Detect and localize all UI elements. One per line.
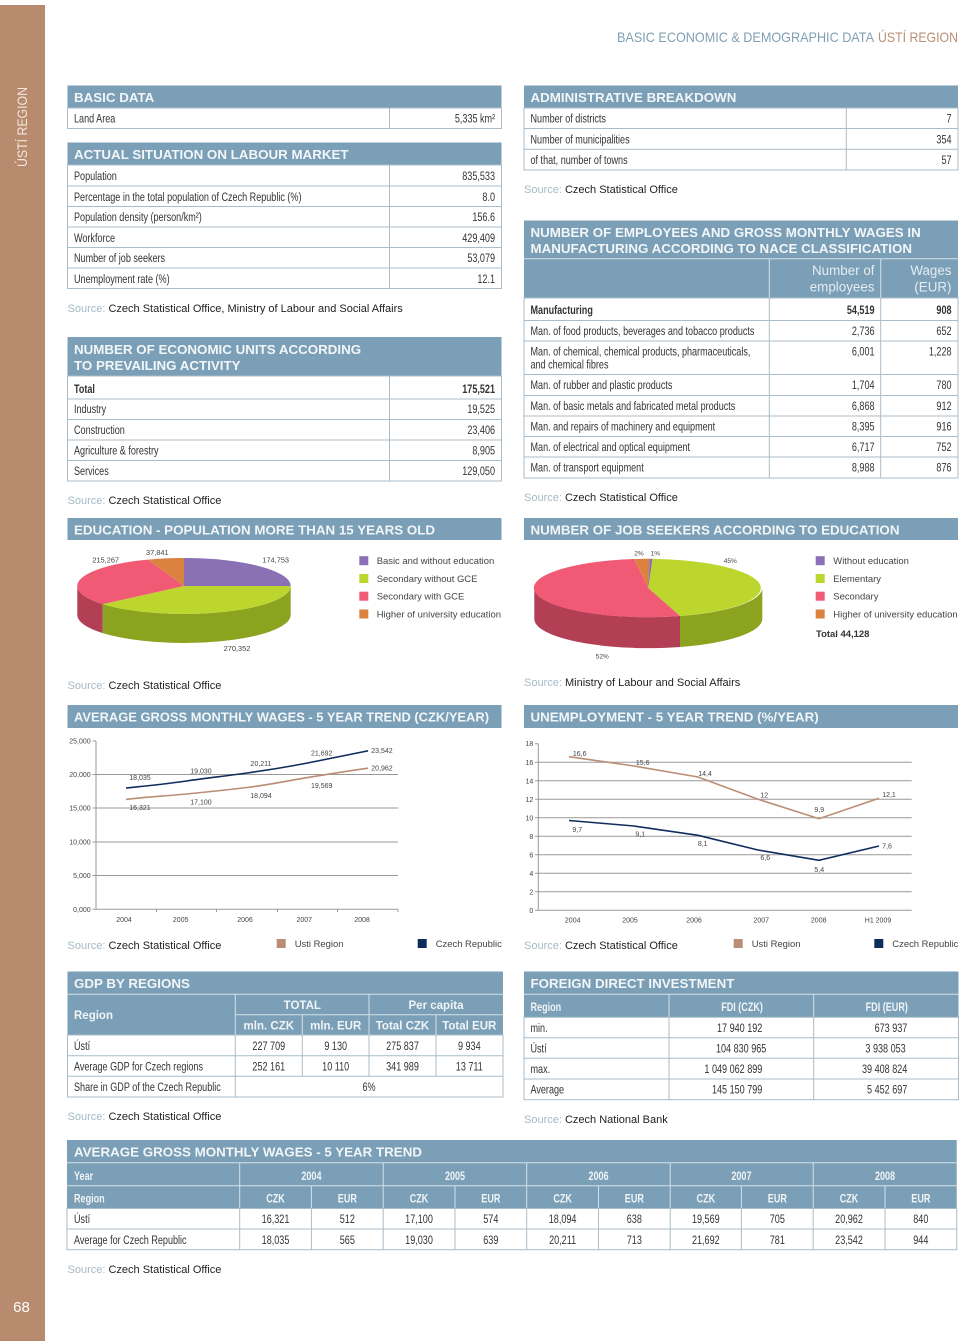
page header: BASIC ECONOMIC & DEMOGRAPHIC DATA <box>617 29 875 45</box>
line chart: unemployment: 0 <box>529 908 533 915</box>
line chart: unemployment: 2006 <box>686 918 702 924</box>
line chart: unemployment: 2008 <box>811 918 827 924</box>
panel: wages 5 year table: CZK <box>697 1192 715 1206</box>
panel: GDP by regions: 9 130 <box>324 1040 347 1053</box>
panel: foreign direct investment: Region <box>531 1001 561 1014</box>
panel: labour market: Workforce <box>74 232 115 245</box>
panel: wages 5 year table: 2005 <box>445 1170 465 1183</box>
panel: foreign direct investment: 17 940 192 <box>717 1022 762 1035</box>
line chart: unemployment: 9,1 <box>635 832 645 838</box>
line chart: wages: 16,321 <box>129 805 151 812</box>
line chart: unemployment: 9,7 <box>572 827 582 834</box>
panel: labour market: 156.6 <box>472 211 495 224</box>
panel: education pie <box>68 518 502 653</box>
panel: foreign direct investment: Ústí <box>531 1041 547 1056</box>
panel: employees and wages: Man. of basic metals and fabricated metal products <box>531 400 735 413</box>
pie chart: education: 215,267 <box>92 556 119 564</box>
source: Source: Czech Statistical Office <box>68 495 221 507</box>
panel: foreign direct investment <box>524 972 958 1100</box>
line chart: unemployment: 12 <box>760 792 768 800</box>
panel: administrative breakdown: ADMINISTRATIVE BREAKDOWN <box>530 90 736 105</box>
legend: unemployment chart: Czech Republic <box>892 939 959 950</box>
panel: wages 5 year table: 21,692 <box>692 1234 720 1247</box>
line chart: unemployment: 12,1 <box>882 792 896 799</box>
panel: economic units: 19,525 <box>467 403 495 416</box>
panel: wages 5 year table <box>67 1140 957 1250</box>
panel: employees and wages: Man. of electrical and optical equipment <box>531 441 690 454</box>
line chart: unemployment: 2 <box>529 889 533 896</box>
panel: employees and wages: 6,868 <box>852 400 875 413</box>
panel: employees and wages: 1,704 <box>852 379 875 392</box>
line chart: unemployment: 16 <box>526 760 533 767</box>
panel: wages 5 year table: Year <box>74 1170 93 1183</box>
panel: wages line chart: AVERAGE GROSS MONTHLY WAGES - 5 YEAR TREND (CZK/YEAR) <box>74 710 489 724</box>
panel: labour market: Number of job seekers <box>74 252 165 265</box>
panel: employees and wages: 912 <box>936 400 952 413</box>
panel: GDP by regions: Total CZK <box>376 1019 430 1033</box>
panel: wages 5 year table: 840 <box>913 1213 928 1226</box>
panel: wages 5 year table: 18,035 <box>262 1234 289 1247</box>
legend: job seekers <box>816 556 958 640</box>
line chart: wages: 25,000 <box>69 738 91 746</box>
panel: GDP by regions: 341 989 <box>386 1060 419 1074</box>
pie chart: education <box>77 548 291 653</box>
line chart: wages: 2004 <box>116 917 132 924</box>
panel: GDP by regions: 13 711 <box>456 1060 483 1074</box>
source: Source: Czech Statistical Office <box>524 492 678 504</box>
line chart: unemployment: 15,6 <box>636 760 650 767</box>
line chart: wages: 18,094 <box>250 793 272 800</box>
panel: wages 5 year table: 20,962 <box>835 1213 863 1226</box>
legend: job seekers: Without education <box>833 556 909 567</box>
legend: job seekers: Higher of university education <box>833 609 958 620</box>
line chart: unemployment: 9,9 <box>814 807 824 814</box>
panel: wages 5 year table: 2008 <box>875 1170 895 1183</box>
source: Source: Czech Statistical Office, Ministry of Labour and Social Affairs <box>68 303 403 315</box>
panel: labour market: Population <box>74 170 117 183</box>
panel: wages 5 year table: 565 <box>340 1234 355 1247</box>
line chart: unemployment: 7,6 <box>882 844 892 850</box>
panel: economic units: 129,050 <box>462 465 495 478</box>
panel: employees and wages: 908 <box>936 304 952 317</box>
line chart: unemployment: 16,6 <box>573 751 587 758</box>
panel: employees and wages: Manufacturing <box>531 304 593 317</box>
panel: wages 5 year table: Average for Czech Republic <box>74 1234 187 1247</box>
panel: employees and wages: 2,736 <box>852 325 875 338</box>
panel: basic data: 5,335 km² <box>455 112 496 126</box>
panel: economic units: TO PREVAILING ACTIVITY <box>74 358 241 373</box>
panel: economic units: Total <box>74 383 95 396</box>
panel: employees and wages: and chemical fibres <box>531 358 609 372</box>
panel: labour market: Percentage in the total population of Czech Republic (%) <box>74 191 301 204</box>
panel: GDP by regions: TOTAL <box>284 999 321 1012</box>
line chart: unemployment: 5,4 <box>814 867 824 874</box>
panel: employees and wages: 8,395 <box>852 420 875 434</box>
panel: employees and wages: 876 <box>936 461 952 475</box>
panel: employees and wages: Man. of food products, beverages and tobacco products <box>531 325 754 338</box>
panel: employees and wages: 652 <box>936 325 952 338</box>
panel: GDP by regions: Average GDP for Czech regions <box>74 1060 203 1074</box>
panel: foreign direct investment: 673 937 <box>875 1022 907 1035</box>
panel: economic units: NUMBER OF ECONOMIC UNITS ACCORDING <box>74 342 361 357</box>
line chart: wages: 17,100 <box>190 800 212 806</box>
pie chart: education: 37,841 <box>146 548 169 557</box>
panel: wages 5 year table: 713 <box>627 1234 642 1247</box>
panel: wages 5 year table: 639 <box>483 1234 498 1247</box>
legend: education <box>359 556 501 620</box>
panel: basic data <box>68 86 502 128</box>
panel: wages 5 year table: 944 <box>913 1234 928 1247</box>
panel: economic units <box>68 337 502 481</box>
panel: employees and wages: MANUFACTURING ACCORDING TO NACE CLASSIFICATION <box>530 241 912 256</box>
line chart: unemployment <box>526 741 912 924</box>
panel: economic units: Construction <box>74 424 125 437</box>
panel: wages 5 year table: 16,321 <box>262 1213 289 1226</box>
panel: GDP by regions: mln. CZK <box>244 1019 295 1033</box>
panel: wages 5 year table: EUR <box>338 1192 357 1206</box>
source: Source: Ministry of Labour and Social Affairs <box>524 677 741 689</box>
panel: foreign direct investment: 104 830 965 <box>716 1042 766 1056</box>
panel: employees and wages: 1,228 <box>929 345 952 359</box>
panel: labour market: 12.1 <box>477 273 495 286</box>
line chart: unemployment: 2004 <box>565 918 581 924</box>
panel: job seekers pie <box>524 518 958 660</box>
panel: basic data: Land Area <box>74 112 115 126</box>
legend: education: Basic and without education <box>377 556 494 567</box>
panel: wages 5 year table: EUR <box>911 1192 931 1206</box>
panel: GDP by regions <box>68 972 503 1097</box>
legend: unemployment chart <box>734 939 959 950</box>
panel: wages 5 year table: 574 <box>483 1213 498 1226</box>
panel: wages 5 year table: 2007 <box>731 1170 752 1183</box>
line chart: wages: 2007 <box>297 917 312 924</box>
panel: GDP by regions: Total EUR <box>442 1019 497 1033</box>
panel: employees and wages: 6,717 <box>852 441 875 454</box>
panel: foreign direct investment: max. <box>531 1063 550 1076</box>
panel: administrative breakdown: Number of municipalities <box>531 133 630 147</box>
panel: GDP by regions: mln. EUR <box>310 1019 362 1033</box>
panel: foreign direct investment: 145 150 799 <box>712 1083 762 1097</box>
legend: wages chart: Czech Republic <box>436 939 502 950</box>
panel: labour market: ACTUAL SITUATION ON LABOUR MARKET <box>74 147 349 162</box>
panel: employees and wages: Wages <box>910 263 952 278</box>
line chart: unemployment: H1 2009 <box>865 918 891 924</box>
pie chart: job seekers: 2% <box>634 550 644 557</box>
panel: employees and wages: Number of <box>812 263 875 278</box>
panel: foreign direct investment: 39 408 824 <box>862 1063 907 1076</box>
panel: unemployment line chart <box>524 705 958 924</box>
panel: wages 5 year table: 781 <box>770 1234 785 1247</box>
source: Source: Czech National Bank <box>524 1114 668 1126</box>
pie chart: job seekers: 1% <box>651 550 660 557</box>
panel: economic units: Services <box>74 465 109 478</box>
panel: wages 5 year table: 20,211 <box>549 1234 576 1247</box>
line chart: unemployment: 18 <box>526 741 533 748</box>
source: Source: Czech Statistical Office <box>68 680 221 692</box>
panel: labour market: 53,079 <box>467 252 495 265</box>
panel: administrative breakdown: of that, number of towns <box>531 154 628 167</box>
panel: basic data: BASIC DATA <box>74 90 155 105</box>
panel: economic units: 8,905 <box>472 444 495 458</box>
panel: GDP by regions: 9 934 <box>458 1040 481 1053</box>
panel: wages 5 year table: Region <box>74 1192 105 1206</box>
line chart: unemployment: 6 <box>529 852 533 859</box>
panel: administrative breakdown: 7 <box>946 112 952 126</box>
line chart: unemployment: 12 <box>526 797 533 804</box>
line chart: unemployment: 2005 <box>622 918 638 924</box>
panel: GDP by regions: 10 110 <box>322 1060 349 1074</box>
panel: employees and wages: 6,001 <box>852 345 875 359</box>
panel: economic units: Agriculture & forestry <box>74 444 159 458</box>
panel: employees and wages: 916 <box>936 420 952 434</box>
panel: employees and wages: 752 <box>936 441 952 454</box>
panel: employees and wages <box>524 220 958 478</box>
panel: job seekers pie: NUMBER OF JOB SEEKERS ACCORDING TO EDUCATION <box>530 522 899 538</box>
panel: foreign direct investment: 3 938 053 <box>865 1042 906 1056</box>
panel: wages 5 year table: CZK <box>840 1192 859 1206</box>
line chart: unemployment: 14 <box>526 778 533 785</box>
panel: employees and wages: NUMBER OF EMPLOYEES AND GROSS MONTHLY WAGES IN <box>530 225 921 240</box>
panel: administrative breakdown: 57 <box>941 154 952 167</box>
source: Source: Czech Statistical Office <box>524 940 678 952</box>
panel: GDP by regions: Share in GDP of the Czech Republic <box>74 1081 221 1094</box>
panel: foreign direct investment: FOREIGN DIRECT INVESTMENT <box>530 976 734 991</box>
panel: wages 5 year table: 19,030 <box>405 1234 433 1247</box>
legend: unemployment chart: Usti Region <box>752 939 800 950</box>
panel: employees and wages: (EUR) <box>914 280 952 294</box>
panel: foreign direct investment: Average <box>531 1083 564 1097</box>
panel: employees and wages: Man. and repairs of machinery and equipment <box>531 420 715 434</box>
line chart: wages: 2005 <box>173 917 189 924</box>
line chart: wages: 23,542 <box>371 748 393 755</box>
pie chart: education: 270,352 <box>224 644 250 653</box>
panel: foreign direct investment: FDI (EUR) <box>866 1001 908 1014</box>
source: Source: Czech Statistical Office <box>68 1264 221 1276</box>
panel: wages 5 year table: EUR <box>768 1192 787 1206</box>
pie chart: education: 174,753 <box>262 556 289 564</box>
panel: economic units: 23,406 <box>467 424 495 437</box>
panel: wages 5 year table: 2006 <box>588 1170 609 1183</box>
panel: labour market: Unemployment rate (%) <box>74 273 170 286</box>
panel: labour market <box>68 142 502 288</box>
panel: GDP by regions: Region <box>74 1009 113 1022</box>
panel: economic units: 175,521 <box>462 383 495 396</box>
panel: employees and wages: Man. of transport equipment <box>531 461 644 475</box>
line chart: wages: 18,035 <box>129 775 151 782</box>
panel: employees and wages: Man. of rubber and plastic products <box>531 379 672 392</box>
pie chart: job seekers: 45% <box>724 558 737 565</box>
panel: employees and wages: 8,988 <box>852 461 875 475</box>
sidebar <box>0 5 45 1341</box>
panel: GDP by regions: Ústí <box>74 1039 90 1053</box>
panel: wages 5 year table: 2004 <box>301 1170 322 1183</box>
panel: administrative breakdown: 354 <box>936 133 952 147</box>
line chart: wages: 19,030 <box>190 768 212 776</box>
line chart: wages: 2006 <box>237 917 253 924</box>
source: Source: Czech Statistical Office <box>524 184 678 196</box>
panel: labour market: 8.0 <box>482 191 495 204</box>
legend: education: Higher of university education <box>377 609 501 620</box>
line chart: unemployment: 10 <box>526 815 533 822</box>
panel: foreign direct investment: min. <box>531 1022 548 1035</box>
line chart: unemployment: 2007 <box>754 918 769 924</box>
pie chart: job seekers <box>534 550 762 660</box>
panel: GDP by regions: 252 161 <box>252 1060 285 1074</box>
panel: foreign direct investment: 1 049 062 899 <box>704 1063 762 1076</box>
panel: employees and wages: 780 <box>936 379 952 392</box>
panel: employees and wages: 54,519 <box>847 304 875 317</box>
panel: wages 5 year table: CZK <box>553 1192 572 1206</box>
line chart: wages: 0,000 <box>73 907 91 914</box>
line chart: wages: 19,569 <box>311 783 333 790</box>
panel: economic units: Industry <box>74 403 107 416</box>
page number: 68 <box>13 1299 30 1316</box>
panel: wages line chart <box>68 705 502 924</box>
line chart: unemployment: 8 <box>529 834 533 841</box>
panel: wages 5 year table: 705 <box>770 1213 785 1226</box>
line chart: wages: 21,692 <box>311 750 333 758</box>
panel: GDP by regions: GDP BY REGIONS <box>74 976 190 991</box>
legend: job seekers: Elementary <box>833 574 881 585</box>
legend: education: Secondary without GCE <box>377 574 477 585</box>
line chart: wages: 20,000 <box>69 772 91 779</box>
panel: GDP by regions: 6% <box>363 1081 376 1094</box>
line chart: wages: 20,962 <box>371 766 393 772</box>
panel: administrative breakdown: Number of districts <box>531 112 606 126</box>
sidebar label: ÚSTÍ REGION <box>15 87 30 167</box>
panel: wages 5 year table: 23,542 <box>835 1234 863 1247</box>
panel: wages 5 year table: 19,569 <box>692 1213 720 1226</box>
panel: education pie: EDUCATION - POPULATION MORE THAN 15 YEARS OLD <box>74 522 435 538</box>
panel: unemployment line chart: UNEMPLOYMENT - 5 YEAR TREND (%/YEAR) <box>530 710 819 724</box>
line chart: unemployment: 4 <box>529 871 533 878</box>
panel: wages 5 year table: CZK <box>410 1192 429 1206</box>
panel: GDP by regions: 227 709 <box>252 1040 285 1053</box>
panel: wages 5 year table: EUR <box>481 1192 501 1206</box>
panel: employees and wages: Man. of chemical, chemical products, pharmaceuticals, <box>531 345 750 359</box>
legend: wages chart <box>277 939 502 950</box>
line chart: unemployment: 14,4 <box>698 771 712 778</box>
source: Source: Czech Statistical Office <box>68 1111 221 1123</box>
line chart: wages: 15,000 <box>69 806 91 812</box>
panel: wages 5 year table: CZK <box>266 1192 285 1206</box>
panel: labour market: 429,409 <box>462 232 495 245</box>
panel: labour market: 835,533 <box>462 170 495 183</box>
panel: administrative breakdown <box>524 86 958 170</box>
line chart: wages <box>69 738 398 924</box>
panel: wages 5 year table: 18,094 <box>549 1213 577 1226</box>
legend: job seekers: Secondary <box>833 592 879 602</box>
pie chart: job seekers: 52% <box>596 653 609 660</box>
line chart: unemployment: 8,1 <box>698 841 708 848</box>
panel: wages 5 year table: 17,100 <box>405 1213 433 1226</box>
legend: wages chart: Usti Region <box>295 939 343 950</box>
panel: wages 5 year table: AVERAGE GROSS MONTHLY WAGES - 5 YEAR TREND <box>74 1144 422 1160</box>
panel: employees and wages: employees <box>810 280 875 294</box>
line chart: wages: 20,211 <box>251 761 272 768</box>
panel: foreign direct investment: FDI (CZK) <box>721 1001 763 1014</box>
panel: wages 5 year table: 512 <box>340 1213 355 1226</box>
panel: GDP by regions: 275 837 <box>386 1040 419 1053</box>
panel: wages 5 year table: Ústí <box>74 1212 90 1226</box>
legend: job seekers: Total 44,128 <box>816 629 869 640</box>
line chart: wages: 10,000 <box>69 840 91 846</box>
panel: wages 5 year table: 638 <box>627 1213 642 1226</box>
legend: education: Secondary with GCE <box>377 592 464 602</box>
line chart: unemployment: 6,6 <box>760 855 770 862</box>
panel: wages 5 year table: EUR <box>625 1192 644 1206</box>
panel: labour market: Population density (person/km²) <box>74 211 202 224</box>
panel: foreign direct investment: 5 452 697 <box>867 1083 907 1097</box>
line chart: wages: 5,000 <box>73 873 91 880</box>
line chart: wages: 2008 <box>354 917 370 924</box>
panel: GDP by regions: Per capita <box>409 999 464 1012</box>
source: Source: Czech Statistical Office <box>68 940 221 952</box>
